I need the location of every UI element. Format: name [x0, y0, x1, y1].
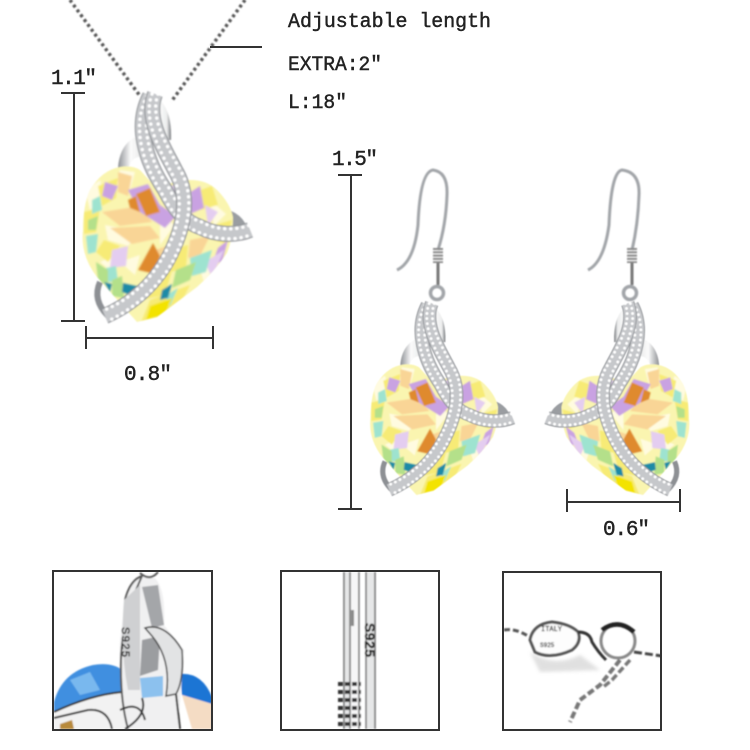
left ear hook: [397, 170, 447, 300]
width label: 0.8": [124, 364, 172, 387]
chain length leader line: [210, 46, 262, 48]
earring width dimension: [567, 489, 680, 542]
hook detail photo: [338, 572, 378, 729]
earring width label: 0.6": [603, 519, 650, 542]
height bracket: [61, 93, 85, 321]
earring height bracket: [338, 175, 362, 509]
detail panel: chain clasp stamp: [503, 572, 662, 730]
earring height dimension: [332, 149, 378, 509]
hook detail frame: [281, 571, 439, 730]
chain length label: L:18": [288, 92, 347, 115]
clasp detail photo: [504, 622, 662, 722]
extra length label: EXTRA:2": [288, 54, 382, 77]
pendant detail frame: [53, 571, 212, 730]
adjustable length label: Adjustable length: [288, 11, 491, 34]
pendant detail photo: [54, 572, 212, 729]
width bracket: [86, 326, 213, 349]
polished bail: [120, 576, 184, 729]
detail panel: pendant S925 stamp: [53, 571, 212, 730]
left earring: [364, 170, 512, 502]
right earring: [547, 170, 696, 502]
right ear hook: [588, 170, 639, 300]
height label: 1.1": [51, 68, 97, 91]
clasp detail frame: [503, 572, 661, 730]
right heart pendant: [547, 303, 696, 502]
pendant width dimension: [86, 326, 213, 387]
left heart pendant: [364, 303, 512, 502]
pendant detail photo: S925: [119, 627, 131, 657]
clasp detail photo: ITALY: [541, 626, 563, 634]
pendant heart: [75, 94, 250, 330]
earring width bracket: [567, 489, 680, 512]
chain length text: [288, 11, 491, 115]
clasp detail photo: S925: [540, 642, 555, 649]
necklace chain: [70, 0, 245, 102]
earring height label: 1.5": [332, 149, 378, 172]
pendant height dimension: [51, 68, 97, 321]
hook detail photo: S925: [362, 623, 378, 657]
detail panel: hook S925 stamp: [281, 571, 439, 730]
pendant necklace: [70, 0, 250, 330]
